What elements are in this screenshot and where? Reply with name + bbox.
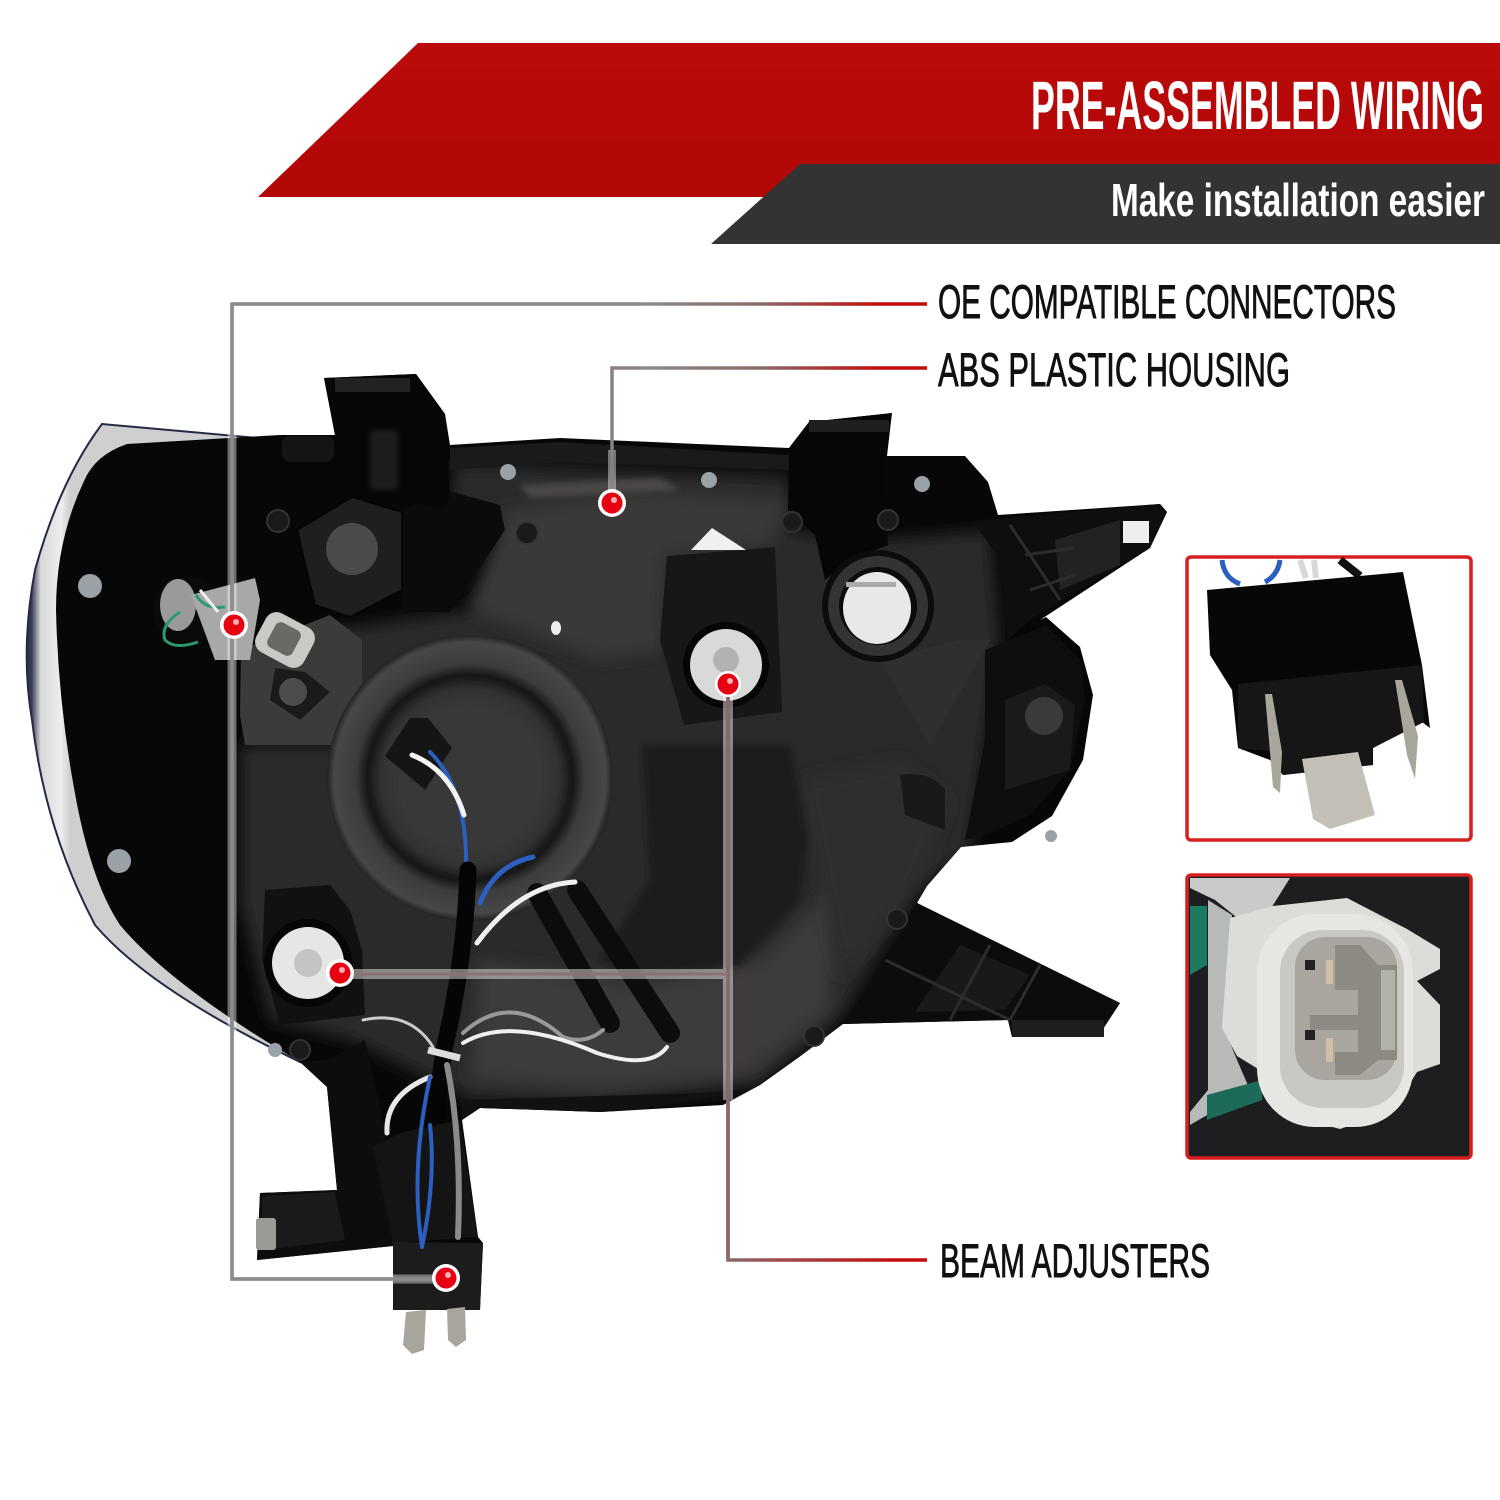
connector wires [164,612,198,646]
upper mounting tab [324,374,450,510]
callout dots [220,489,741,1292]
inset wires [1222,560,1280,584]
right mounting tab [788,413,892,580]
connector bed [240,615,362,745]
zip tie [428,1050,460,1058]
rubber boot [327,635,613,921]
plastic studs [267,510,907,1060]
H4 plug [373,1120,478,1243]
lower right bracket [843,903,1120,1037]
white spot [551,621,561,635]
boot grommet [385,718,452,790]
label: ABS plastic housing: ABS PLASTIC HOUSING [938,343,1290,396]
small tube [282,436,334,462]
housing shading [240,442,1085,1122]
label: beam adjusters: BEAM ADJUSTERS [940,1234,1210,1287]
inset connector shell [1222,898,1440,1129]
lens edge [27,424,300,1062]
inset: H4 plug [1187,557,1471,840]
round port [822,550,934,662]
housing silhouette [56,374,1167,1310]
lower bracket [257,1040,393,1260]
hex cap [297,497,402,617]
bulb socket [153,577,219,643]
plug wires [418,1065,459,1247]
inset plug body [1207,572,1430,775]
dark subtitle banner [711,164,1500,244]
right arm bracket [973,504,1167,640]
inset left clip [1190,878,1290,920]
plug terminals [403,1310,426,1354]
screws [78,464,1057,1057]
red title banner [258,43,1500,197]
upper adjuster box [660,547,782,725]
inset pins [1265,694,1282,793]
wire harness [363,752,667,1133]
lower bolt [270,668,330,720]
callout line: ABS plastic housing [612,368,927,503]
inset: connector close-up [1187,875,1471,1158]
connector [191,578,260,660]
callout line: beam adjusters [340,684,927,1260]
lower adjuster [262,885,365,1025]
inline connectors [537,890,670,1033]
callout line: OE compatible connectors [232,304,927,1279]
headlight rear photo [27,374,1167,1354]
inset connector keys [1310,945,1397,1075]
